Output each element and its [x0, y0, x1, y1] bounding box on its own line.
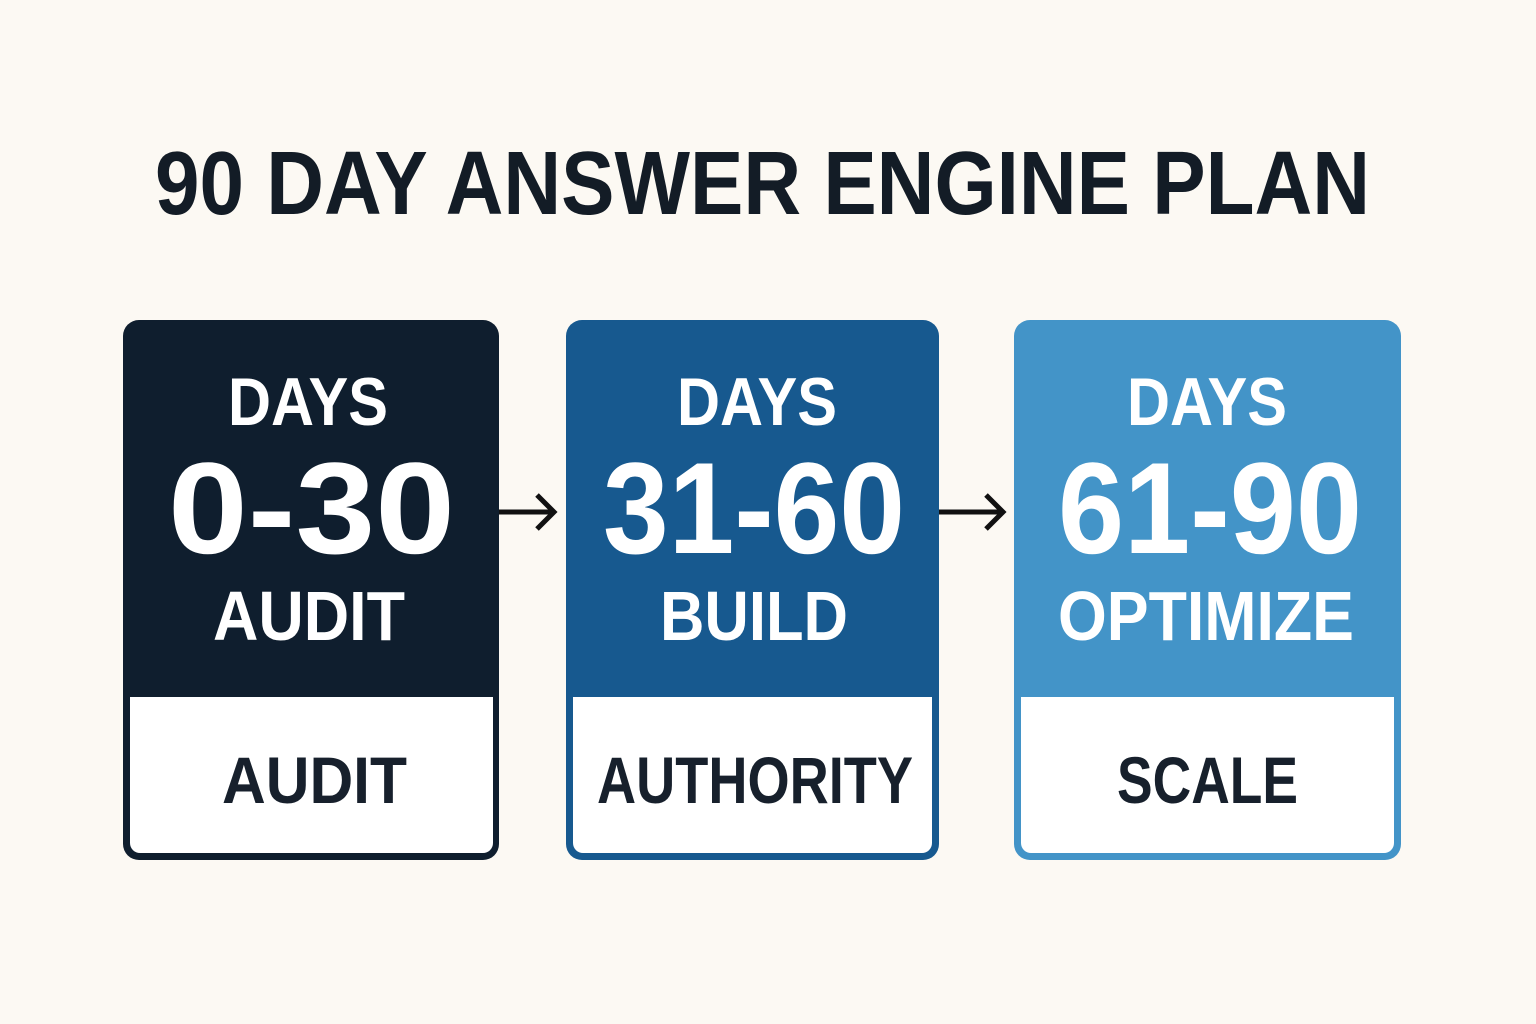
panel: days 61-90 optimize: OPTIMIZE	[1058, 577, 1354, 655]
panel: days 31-60 build: DAYS	[677, 364, 837, 440]
panel: days 0-30 audit: DAYS	[228, 364, 388, 440]
label: authority: AUTHORITY	[597, 743, 913, 817]
panel: days 31-60 build	[566, 320, 939, 860]
label: scale: SCALE	[1117, 743, 1298, 817]
panel: days 0-30 audit: AUDIT	[213, 577, 405, 655]
panel: days 31-60 build: 31-60	[603, 435, 905, 581]
label: audit: AUDIT	[222, 743, 407, 817]
panel: days 31-60 build: BUILD	[660, 577, 848, 655]
arrow 2	[939, 495, 1003, 529]
panel: days 61-90 optimize	[1014, 320, 1401, 860]
arrow 1	[499, 495, 554, 529]
panel: days 61-90 optimize: 61-90	[1058, 435, 1362, 581]
panel: days 61-90 optimize: DAYS	[1127, 364, 1287, 440]
panel: days 0-30 audit: 0-30	[168, 435, 455, 581]
panel: days 0-30 audit	[123, 320, 499, 860]
title: 90 DAY ANSWER ENGINE PLAN	[155, 134, 1370, 234]
